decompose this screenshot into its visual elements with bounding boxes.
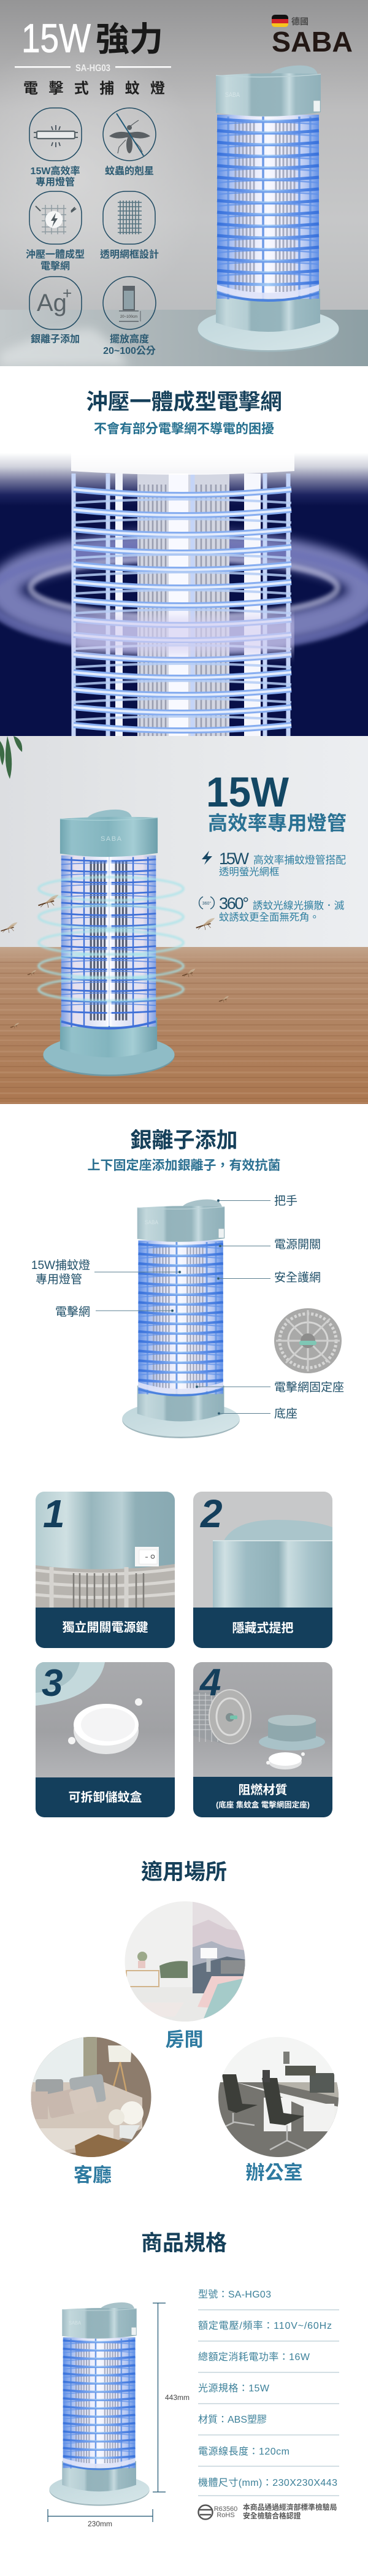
icon: tube	[29, 108, 82, 161]
card 3: tray	[36, 1662, 175, 1818]
callout labels right	[274, 1194, 344, 1420]
heading: 商品規格	[141, 2231, 227, 2255]
number 3: 3	[42, 1662, 63, 1704]
photo: office	[218, 2036, 339, 2159]
product lamp: SABA	[69, 2320, 82, 2326]
callout labels right: 電擊網固定座	[274, 1381, 344, 1394]
card 1: power switch	[36, 1492, 175, 1648]
card 2: handle	[193, 1492, 332, 1648]
subheading: 不會有部分電擊網不導電的困擾	[94, 421, 274, 436]
model rule right	[115, 66, 171, 67]
spec list: 機體尺寸(mm)：230X230X443	[198, 2477, 337, 2488]
title: 強力: 強力	[96, 20, 163, 58]
model number: SA-HG03	[75, 63, 110, 74]
label: 15W tube: 15W高效率	[31, 165, 80, 177]
feature text 15W: 透明螢光網框	[219, 867, 279, 878]
panel: suitable places	[31, 1860, 339, 2186]
icon: mesh frame	[103, 191, 155, 244]
spec list: 總額定消耗電功率：16W	[198, 2352, 310, 2363]
label: press-formed	[26, 248, 85, 272]
product lamp	[43, 810, 175, 1076]
icon: mosquito	[103, 108, 156, 161]
callout labels right: 底座	[274, 1407, 297, 1420]
icon: placement height: 20~100cm	[120, 315, 137, 319]
label: press-formed: 沖壓一體成型	[26, 248, 85, 260]
panel: silver ion	[0, 1104, 368, 1484]
icon: silver ion	[29, 277, 82, 329]
panel: hero	[0, 0, 368, 366]
dimension: width: 230mm	[88, 2520, 112, 2528]
certification note: 安全檢驗合格認證	[243, 2512, 301, 2520]
feature text 360	[219, 894, 345, 923]
panel: feature cards	[36, 1492, 332, 1818]
brand name: SABA	[272, 26, 353, 58]
product lamp	[122, 1200, 240, 1438]
label: 15W tube: 專用燈管	[36, 176, 75, 188]
icon: 360	[199, 897, 214, 909]
card 4 note: (底座 集蚊盒 電擊網固定座)	[216, 1800, 310, 1809]
subheading: 上下固定座添加銀離子，有效抗菌	[87, 1158, 281, 1173]
card 4 caption: 阻燃材質	[238, 1783, 287, 1797]
label: mosquito nemesis: 蚊蟲的剋星	[105, 165, 154, 177]
number 4: 4	[199, 1662, 221, 1704]
certification code: R63560	[214, 2505, 237, 2513]
spec list: 電源線長度：120cm	[198, 2446, 289, 2457]
label: placement height: 擺放高度	[110, 333, 149, 345]
certification note: 本商品通過經濟部標準檢驗局	[243, 2503, 337, 2512]
product lamp: SABA	[145, 1219, 158, 1225]
feature text 360: 誘蚊光線光擴散．滅	[253, 900, 345, 911]
callout labels left: 15W捕蚊燈	[31, 1259, 90, 1272]
certification note	[243, 2503, 337, 2520]
callout labels left: 電擊網	[55, 1305, 90, 1319]
card 3 caption: 可拆卸儲蚊盒	[69, 1790, 142, 1804]
heading: 沖壓一體成型電擊網	[86, 389, 282, 414]
label: 15W tube	[31, 165, 80, 188]
swirl rings	[0, 546, 368, 650]
logo	[272, 15, 353, 58]
spec list: 光源規格：15W	[198, 2383, 270, 2394]
panel: press-formed mesh	[0, 366, 368, 736]
spec list: 額定電壓/頻率：110V~/60Hz	[198, 2320, 332, 2331]
heading: tube: 高效率專用燈管	[208, 812, 347, 834]
dimension: width	[48, 2509, 153, 2528]
card 2 caption: 隱藏式提把	[232, 1621, 293, 1635]
label: office: 辦公室	[245, 2162, 303, 2183]
label: living room: 客廳	[74, 2164, 112, 2186]
spec list: 型號：SA-HG03	[198, 2289, 271, 2300]
subtitle: 電擊式捕蚊燈	[23, 80, 175, 97]
callout labels right: 電源開關	[274, 1238, 321, 1251]
icon: German flag	[272, 15, 288, 27]
feature text 360: 蚊誘蚊更全面無死角。	[219, 912, 320, 923]
certification code	[214, 2505, 237, 2519]
callout labels left	[31, 1259, 90, 1319]
mosquitoes	[1, 895, 229, 1029]
icon: placement height	[103, 277, 156, 329]
callout labels right: 把手	[274, 1194, 297, 1208]
label: room: 房間	[166, 2029, 204, 2050]
fixing base photo	[274, 1308, 342, 1373]
product lamp	[49, 2302, 150, 2506]
callout labels left: 專用燈管	[36, 1273, 82, 1286]
panel: specifications	[48, 2231, 339, 2528]
model rule left	[15, 66, 71, 67]
icon: 360: 360°	[202, 901, 211, 906]
card 1 caption: 獨立開關電源鍵	[63, 1620, 148, 1635]
label: press-formed: 電擊網	[40, 261, 70, 272]
icon: bolt	[202, 851, 212, 865]
certification code: RoHS	[217, 2512, 235, 2519]
feature text 15W: 15W	[219, 849, 250, 868]
product lamp: SABA	[225, 91, 240, 99]
icon: press-formed grid	[29, 191, 82, 244]
card 4: flame-retardant material	[193, 1662, 332, 1817]
heading: 銀離子添加	[130, 1129, 238, 1152]
feature text 360: 360°	[219, 894, 249, 913]
label: transparent mesh: 透明網框設計	[100, 248, 159, 260]
number 1: 1	[43, 1492, 65, 1536]
callout lines	[94, 1200, 270, 1414]
label: placement height	[103, 333, 156, 356]
electric mesh closeup	[71, 473, 294, 736]
product lamp	[197, 66, 339, 352]
title: 15W: 15W	[21, 15, 91, 61]
panel: 15W tube	[0, 736, 368, 1104]
dimension: height: 443mm	[165, 2393, 190, 2402]
heading: 適用場所	[141, 1860, 227, 1884]
photo: room	[125, 1901, 248, 2024]
icon: silver ion: Ag	[37, 289, 67, 316]
plant leaves	[0, 736, 22, 779]
feature text 15W: 高效率捕蚊燈管搭配	[253, 854, 346, 866]
icon: silver ion: +	[63, 284, 72, 302]
label: silver ion: 銀離子添加	[31, 334, 80, 345]
lamp top cap	[71, 442, 294, 475]
number 2: 2	[200, 1492, 223, 1536]
origin text: 德國	[291, 17, 309, 26]
icon: BSMI mark	[198, 2505, 213, 2520]
callout labels right: 安全護網	[274, 1271, 321, 1284]
dimension: height	[153, 2303, 190, 2492]
feature text 15W	[219, 849, 346, 878]
photo: living room	[31, 2036, 153, 2159]
spec list: 材質：ABS塑膠	[198, 2414, 267, 2425]
spec list	[198, 2289, 339, 2496]
product lamp: SABA	[101, 835, 122, 843]
label: placement height: 20~100公分	[103, 345, 156, 356]
light rings	[39, 877, 183, 1001]
heading: 15W: 15W	[206, 769, 289, 816]
